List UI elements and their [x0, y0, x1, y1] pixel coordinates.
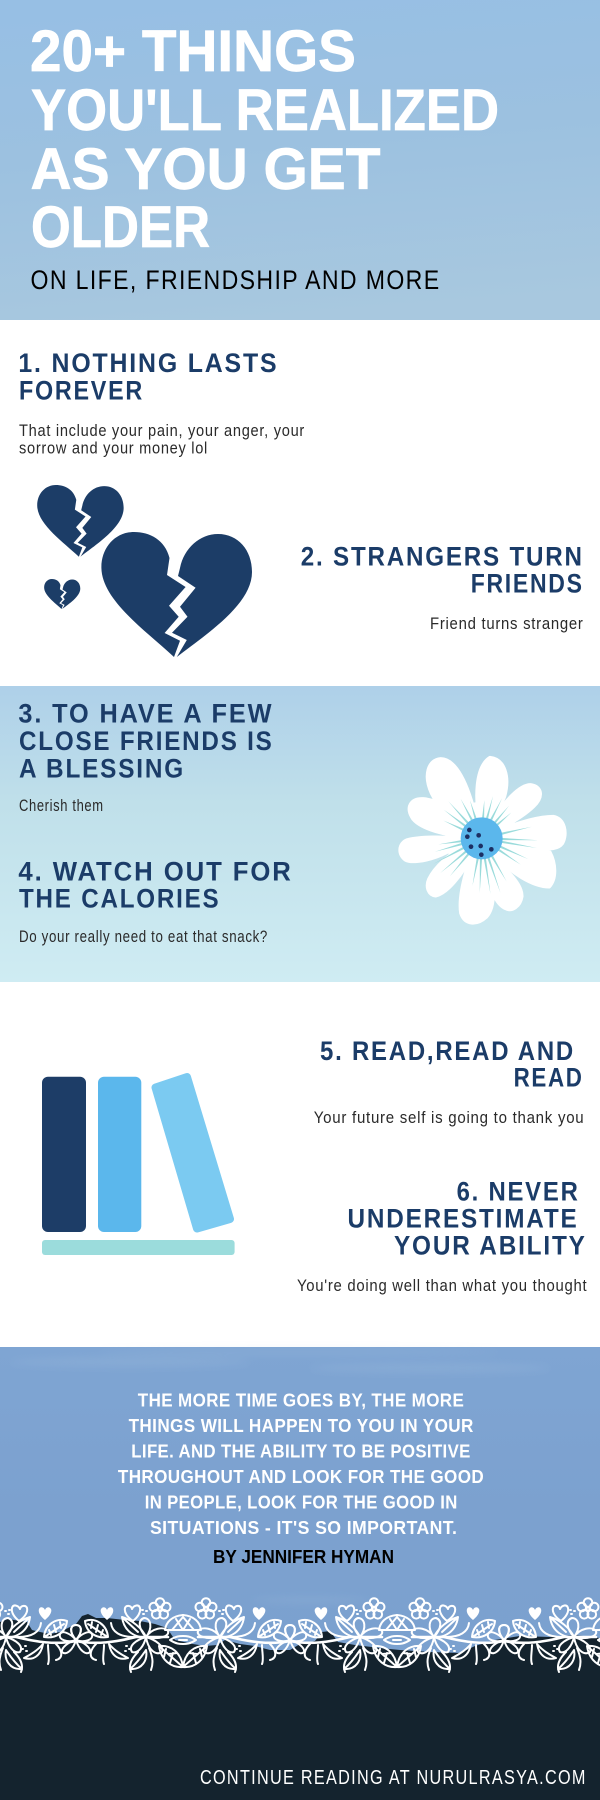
cloud streaks — [10, 1349, 550, 1603]
footer band — [0, 1665, 600, 1800]
icon: books on a shelf — [42, 1077, 235, 1255]
icon: daisy flower — [400, 757, 565, 923]
panel: header — [0, 0, 600, 320]
title: AS YOU GET — [30, 137, 380, 202]
leaning book — [156, 1077, 230, 1228]
sky background — [0, 1347, 600, 1667]
heading: item 6: UNDERESTIMATE — [348, 1204, 578, 1234]
flower seeds — [465, 828, 494, 857]
floral lace border — [0, 1598, 600, 1672]
quote attribution: BY JENNIFER HYMAN — [213, 1547, 394, 1567]
header sky background — [0, 0, 600, 320]
text: item 1 body: That include your pain, your anger, your — [19, 422, 305, 440]
heading: item 2: FRIENDS — [471, 569, 584, 599]
panel: items 3 and 4 — [0, 686, 600, 982]
blue book — [98, 1077, 141, 1232]
title: YOU'LL REALIZED — [31, 78, 499, 143]
panel: quote and footer — [0, 1347, 600, 1800]
quote text: THE MORE TIME GOES BY, THE MORE — [138, 1391, 464, 1411]
flower centre — [461, 817, 503, 859]
text: item 2 body: Friend turns stranger — [430, 615, 584, 633]
dark book — [42, 1077, 86, 1232]
text: item 4 body: Do your really need to eat that snack? — [19, 928, 268, 946]
title: OLDER — [31, 195, 210, 260]
heading: item 3: A BLESSING — [19, 753, 185, 783]
heading: item 3: 3. TO HAVE A FEW — [18, 698, 273, 728]
heading: item 1 — [18, 348, 278, 405]
heading: item 1: FOREVER — [19, 375, 144, 405]
heading: item 3: CLOSE FRIENDS IS — [19, 726, 274, 756]
heading: item 1: 1. NOTHING LASTS — [18, 348, 278, 378]
quote text: SITUATIONS - IT'S SO IMPORTANT. — [150, 1518, 457, 1538]
quote text: IN PEOPLE, LOOK FOR THE GOOD IN — [145, 1492, 458, 1512]
quote text: LIFE. AND THE ABILITY TO BE POSITIVE — [131, 1442, 471, 1462]
title — [30, 19, 499, 260]
heading: item 6 — [348, 1177, 587, 1261]
flower petals — [400, 757, 565, 923]
heading: item 4: 4. WATCH OUT FOR — [18, 857, 293, 887]
heading: item 6: 6. NEVER — [457, 1177, 580, 1207]
quote text — [118, 1391, 484, 1538]
quote text: THROUGHOUT AND LOOK FOR THE GOOD — [118, 1467, 484, 1487]
quote text: THINGS WILL HAPPEN TO YOU IN YOUR — [129, 1416, 474, 1436]
heading: item 4 — [18, 857, 293, 914]
title: 20+ THINGS — [30, 19, 356, 84]
heading: item 5 — [320, 1036, 584, 1093]
flower rays — [433, 796, 538, 894]
text: item 3 body: Cherish them — [19, 797, 104, 815]
heading: item 5: READ — [514, 1063, 584, 1093]
heading: item 5: 5. READ,READ AND — [320, 1036, 575, 1066]
heading: item 2 — [301, 542, 584, 599]
shelf — [42, 1240, 235, 1255]
heading: item 4: THE CALORIES — [19, 884, 220, 914]
heading: item 3 — [18, 698, 274, 783]
tree line silhouette — [0, 1614, 600, 1680]
text: item 1 body: sorrow and your money lol — [19, 439, 208, 457]
panel background — [0, 686, 600, 982]
text: item 1 body — [19, 422, 305, 457]
subtitle: ON LIFE, FRIENDSHIP AND MORE — [30, 265, 440, 295]
icon: broken hearts — [37, 485, 252, 657]
